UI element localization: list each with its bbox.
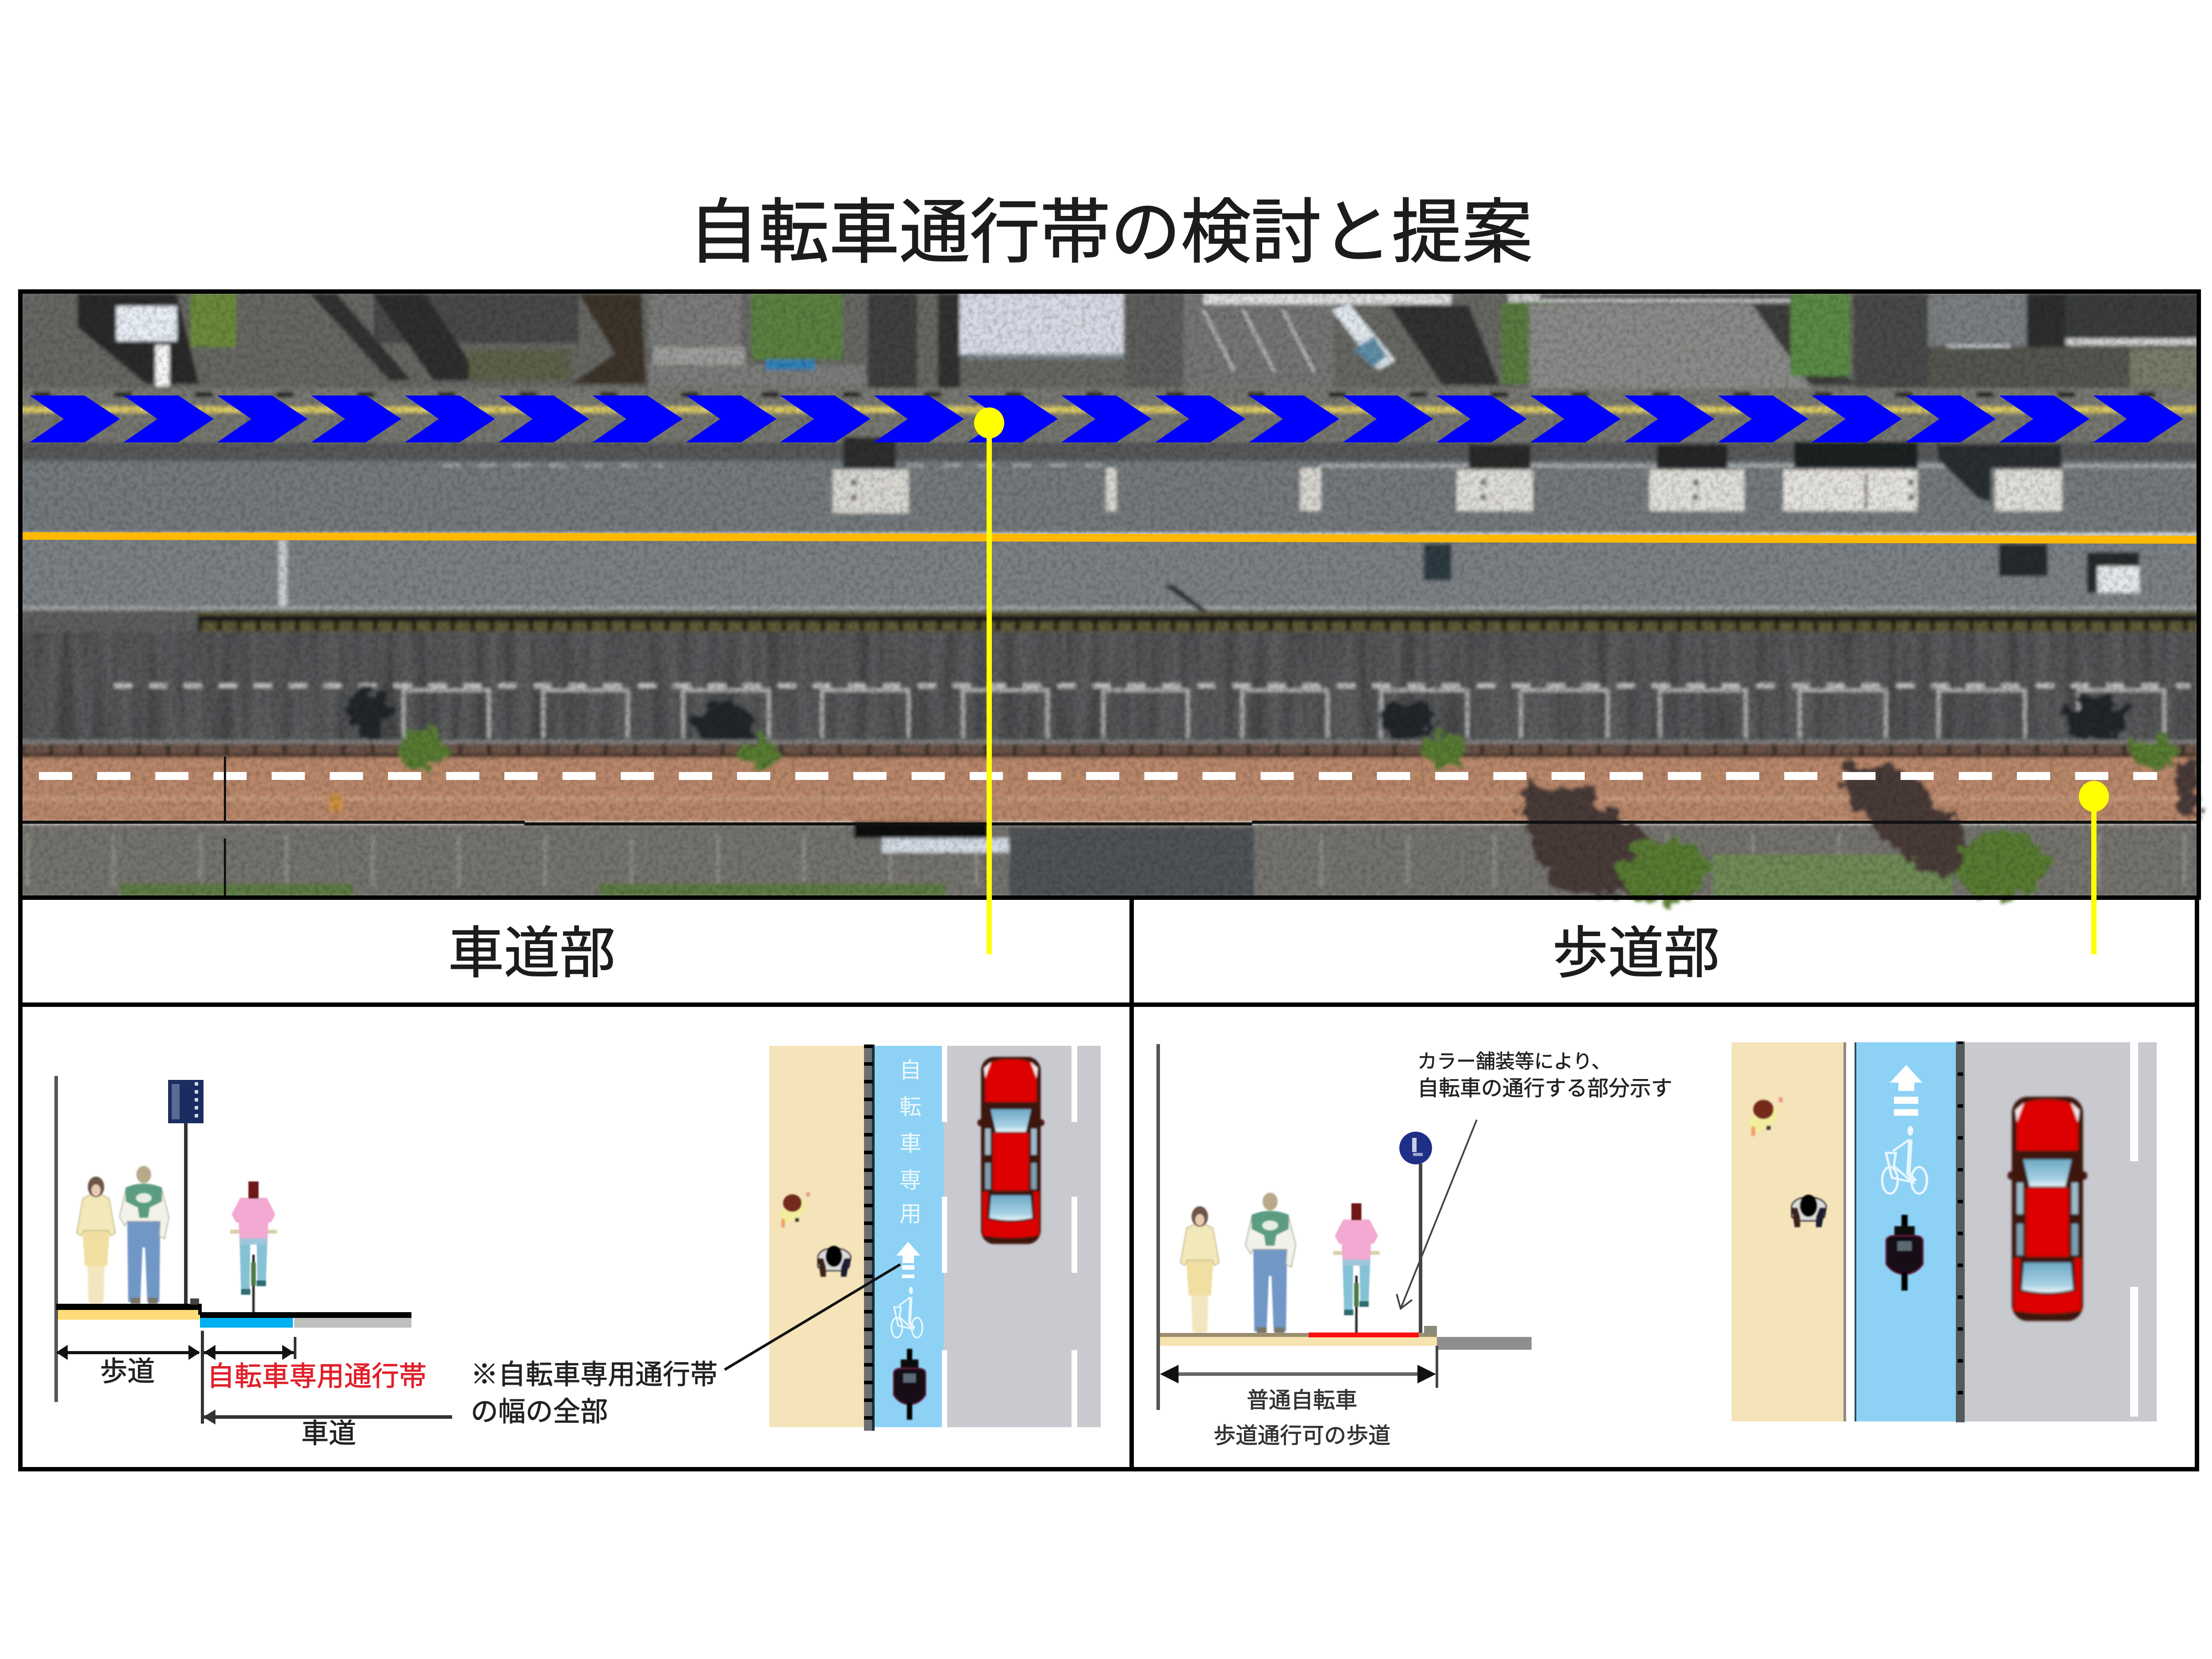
figure: woman	[77, 1177, 115, 1304]
bicycle zone edge	[1855, 1042, 1856, 1421]
boundary line	[1156, 1044, 1160, 1410]
photo frame	[20, 292, 2199, 898]
dimension arrow: sidewalk	[56, 1345, 200, 1360]
bicycle zone	[1855, 1042, 1956, 1421]
label: roadway: 車道	[301, 1418, 356, 1449]
callout: coloured paving: カラー舗装等により、	[1417, 1051, 1611, 1072]
panel: comparison table	[20, 898, 2197, 1469]
label: sidewalk type: 普通自転車	[1247, 1388, 1357, 1413]
boundary line	[54, 1076, 58, 1402]
leader: yellow marker to roadway section	[974, 407, 1004, 954]
bicycle pictogram	[891, 1287, 922, 1338]
figure: woman	[1180, 1206, 1219, 1333]
curb	[864, 1045, 875, 1431]
callout arrow	[1397, 1120, 1477, 1309]
bicycle lane	[875, 1046, 944, 1427]
panel: roadway plan view	[725, 1045, 1101, 1431]
pedestrian	[1792, 1194, 1826, 1227]
lane legend text: 転	[899, 1094, 922, 1119]
figure: cyclist	[1333, 1203, 1379, 1333]
lane arrow	[1890, 1065, 1922, 1116]
trees	[399, 730, 2175, 902]
dimension arrow	[1160, 1365, 1436, 1383]
sidewalk band	[1732, 1042, 1843, 1421]
fence	[20, 740, 2199, 757]
bicycle pictogram	[1882, 1126, 1927, 1194]
leader: yellow marker to sidewalk section	[2079, 781, 2109, 954]
sidewalk band	[769, 1046, 864, 1427]
note: full width of the bicycle lane: ※自転車専用通行帯	[471, 1359, 718, 1390]
road profile	[56, 1298, 411, 1328]
white dashed bicycle line on sidewalk	[39, 772, 2157, 780]
label: sidewalk type: 歩道通行可の歩道	[1214, 1423, 1390, 1448]
photo grain texture	[20, 292, 2199, 896]
heading: sidewalk section: 歩道部	[1552, 922, 1720, 984]
lane legend text: 専	[899, 1168, 922, 1193]
label: bicycle lane: 自転車専用通行帯	[207, 1361, 426, 1392]
lane arrow	[896, 1242, 920, 1278]
figure: man	[119, 1166, 169, 1304]
carriageway	[1965, 1042, 2157, 1421]
orange centre line	[20, 532, 2197, 544]
tree shadows on sidewalk	[1522, 757, 2198, 895]
pedestrian	[1749, 1097, 1783, 1136]
lane markings	[942, 1046, 1077, 1427]
dimension extension line	[1436, 1346, 1438, 1388]
label: sidewalk type	[1214, 1388, 1390, 1448]
lane legend text: 車	[899, 1131, 922, 1156]
road sign	[168, 1080, 204, 1305]
sidewalk profile	[1160, 1326, 1532, 1350]
lane legend text	[899, 1058, 922, 1226]
leader line	[725, 1264, 900, 1370]
pedestrian	[818, 1246, 851, 1277]
sidewalk edge	[1843, 1042, 1846, 1421]
road sign	[1399, 1132, 1432, 1334]
panel: sidewalk plan view	[1732, 1041, 2157, 1422]
aerial photo base imagery	[20, 292, 2199, 902]
car	[977, 1057, 1045, 1244]
title: 自転車通行帯の検討と提案	[688, 193, 1532, 272]
carriageway	[20, 388, 2199, 615]
panel: sidewalk cross-section diagram	[1156, 1044, 1672, 1448]
panel: roadway cross-section diagram	[54, 1076, 718, 1449]
pedestrian	[780, 1192, 810, 1227]
lower pavement and greenery	[20, 824, 2199, 897]
note: full width of the bicycle lane	[471, 1359, 718, 1427]
callout: coloured paving	[1417, 1051, 1672, 1100]
lane legend text: 自	[899, 1058, 922, 1083]
figure: man	[1245, 1193, 1296, 1333]
callout: coloured paving: 自転車の通行する部分示す	[1417, 1077, 1672, 1100]
dimension arrow: bicycle lane	[204, 1345, 294, 1360]
roadside buildings strip	[20, 292, 2199, 389]
note: full width of the bicycle lane: の幅の全部	[471, 1397, 608, 1427]
cyclist top view	[894, 1349, 926, 1420]
lane legend text: 用	[899, 1202, 922, 1226]
brick sidewalk	[20, 757, 2199, 822]
median hedge	[20, 611, 2199, 633]
figure: cyclist	[230, 1182, 277, 1313]
lane markings	[2130, 1042, 2138, 1417]
car	[2008, 1097, 2087, 1321]
carriageway	[944, 1046, 1101, 1427]
heading: roadway section: 車道部	[448, 922, 615, 984]
dimension arrow: roadway	[203, 1409, 452, 1425]
black lines on sidewalk	[20, 757, 2199, 896]
table frame	[20, 898, 2197, 1469]
cyclist top view	[1886, 1215, 1923, 1290]
blue chevrons: proposed cycle lane	[30, 396, 2183, 442]
curb	[1956, 1041, 1965, 1422]
label: sidewalk: 歩道	[100, 1356, 155, 1387]
panel: aerial photo of road	[20, 292, 2199, 902]
parking area	[20, 632, 2199, 747]
dimension extension lines	[201, 1331, 296, 1424]
